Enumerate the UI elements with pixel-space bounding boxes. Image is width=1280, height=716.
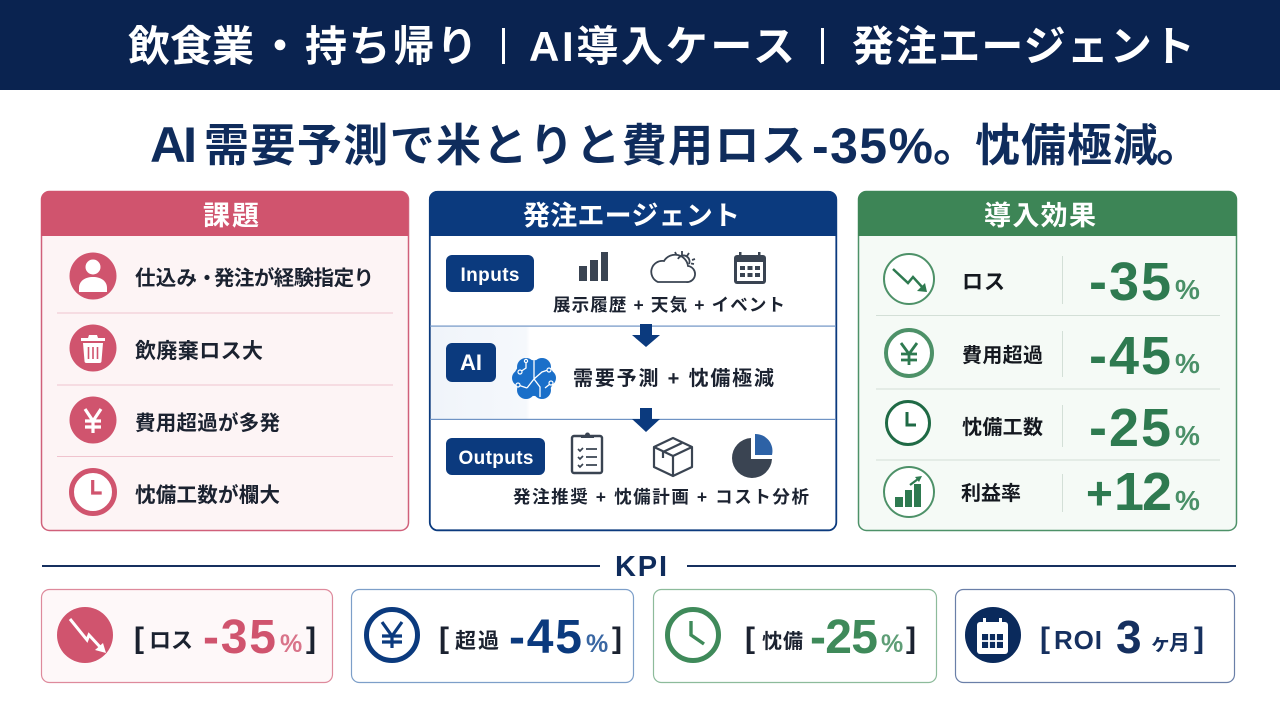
card: 超過: ] — [612, 622, 622, 655]
headline — [150, 117, 1201, 174]
card: 忱備: 忱備 — [762, 630, 803, 653]
card: ROI: ROI — [1054, 625, 1102, 655]
icon: clock — [886, 402, 930, 444]
icon: yen — [70, 396, 116, 444]
row: 利益率: 12 — [1114, 462, 1172, 522]
header banner: 飲食業 — [128, 23, 254, 70]
card: ロス: ] — [306, 622, 316, 655]
icon: calendar — [734, 252, 766, 284]
arrow: AI to outputs — [632, 408, 660, 432]
panel: 発注エージェント — [429, 191, 837, 530]
icon: calendar — [965, 607, 1021, 663]
headline: 需要予測で米とりと費用ロス — [204, 120, 806, 171]
header banner: ・ — [259, 23, 301, 70]
card: ROI: ] — [1194, 622, 1204, 655]
row: 費用超過: -45 — [1089, 326, 1171, 386]
icon: yen — [886, 330, 932, 376]
card: 忱備: % — [881, 630, 903, 658]
card: 超過: 超過 — [455, 630, 499, 653]
icon: bar chart — [579, 252, 608, 281]
headline: 。 — [1156, 120, 1201, 171]
row: ロス: ロス — [962, 271, 1005, 294]
row: 利益率: % — [1175, 485, 1200, 516]
icon: cloud and sun — [651, 251, 695, 282]
row: 忱備工数: % — [1175, 420, 1200, 451]
row: ロス — [884, 252, 1200, 312]
headline: -35% — [812, 118, 933, 174]
heading: KPI: KPI — [615, 551, 667, 583]
row: 利益率 — [884, 462, 1200, 522]
card: 超過 — [352, 590, 634, 682]
row: 費用超過: % — [1175, 348, 1200, 379]
row: ロス: % — [1175, 274, 1200, 305]
heading: 発注エージェント: 発注エージェント — [523, 201, 740, 231]
card: 忱備: ] — [906, 622, 916, 655]
card: 超過: -45 — [509, 611, 582, 664]
text: 仕込み — [135, 266, 374, 290]
row: 費用超過: 費用超過 — [962, 344, 1043, 367]
row: 忱備工数: 忱備工数 — [962, 416, 1043, 439]
card: ROI: ヶ月 — [1150, 632, 1190, 655]
panel: 導入効果 — [858, 191, 1237, 530]
icon: clock — [72, 470, 114, 514]
header banner — [0, 0, 1280, 90]
icon: trash — [70, 324, 116, 372]
heading: 課題: 課題 — [203, 201, 259, 231]
card: ロス: [ — [134, 622, 144, 655]
row: 忱備工数 — [886, 398, 1200, 458]
text: 忱備工数が欄大: 忱備工数が欄大 — [135, 483, 280, 507]
headline: 。 — [933, 120, 978, 171]
header banner: AI導入ケース — [529, 23, 795, 70]
text: 仕込み: 仕込み — [135, 267, 197, 290]
icon: yen ring — [366, 610, 418, 660]
icon: trend down — [884, 254, 934, 304]
heading: 導入効果: 導入効果 — [984, 201, 1096, 231]
card: ROI — [956, 590, 1234, 682]
row: 忱備工数: -25 — [1089, 398, 1171, 458]
icon: trend down — [57, 607, 113, 663]
icon: clock — [668, 610, 718, 660]
badge: Outputs: Outputs — [458, 448, 534, 469]
badge: Inputs — [446, 255, 534, 292]
card: 忱備 — [654, 590, 936, 682]
icon: rising chart — [884, 467, 934, 517]
badge: AI — [446, 343, 496, 382]
text: 費用超過が多発: 費用超過が多発 — [135, 411, 280, 435]
headline: 忱備極減 — [975, 120, 1158, 171]
card: ROI: [ — [1040, 622, 1050, 655]
icon: pie chart — [732, 434, 772, 478]
header banner: 発注エージェント — [852, 23, 1195, 70]
icon: brain circuit — [512, 358, 556, 399]
row: 費用超過 — [886, 326, 1200, 386]
header banner: 持ち帰り — [305, 23, 478, 70]
text: AI function: 需要予測 + 忱備極減 — [573, 366, 774, 390]
text: 飲廃棄ロス大: 飲廃棄ロス大 — [135, 340, 263, 363]
icon: box — [654, 438, 692, 476]
card: ロス — [42, 590, 332, 682]
row: 利益率: 利益率 — [961, 482, 1021, 505]
row: ロス: -35 — [1089, 252, 1171, 312]
badge: Outputs — [446, 438, 545, 475]
card: ロス: % — [280, 630, 302, 658]
card: 忱備: [ — [745, 622, 755, 655]
card: ロス: -35 — [203, 611, 276, 664]
headline: AI — [150, 117, 197, 173]
badge: Inputs: Inputs — [460, 265, 520, 286]
text: outputs list: 発注推奨 + 忱備計画 + コスト分析 — [513, 487, 809, 507]
text: 仕込み: 発注が経験指定り — [214, 266, 374, 290]
card: ロス: ロス — [149, 628, 193, 653]
arrow: inputs to AI — [632, 324, 660, 347]
icon: clipboard checklist — [572, 432, 602, 473]
text: 仕込み: ・ — [197, 268, 217, 290]
card: ROI: 3 — [1116, 611, 1142, 663]
card: 忱備: -25 — [810, 611, 878, 664]
card: 超過: [ — [439, 622, 449, 655]
panel: 課題 — [41, 191, 408, 530]
card: 超過: % — [586, 630, 608, 658]
row: 利益率: + — [1086, 467, 1113, 519]
text: inputs list: 展示履歴 + 天気 + イベント — [553, 295, 785, 315]
badge: AI: AI — [460, 350, 482, 375]
icon: person — [70, 252, 116, 300]
